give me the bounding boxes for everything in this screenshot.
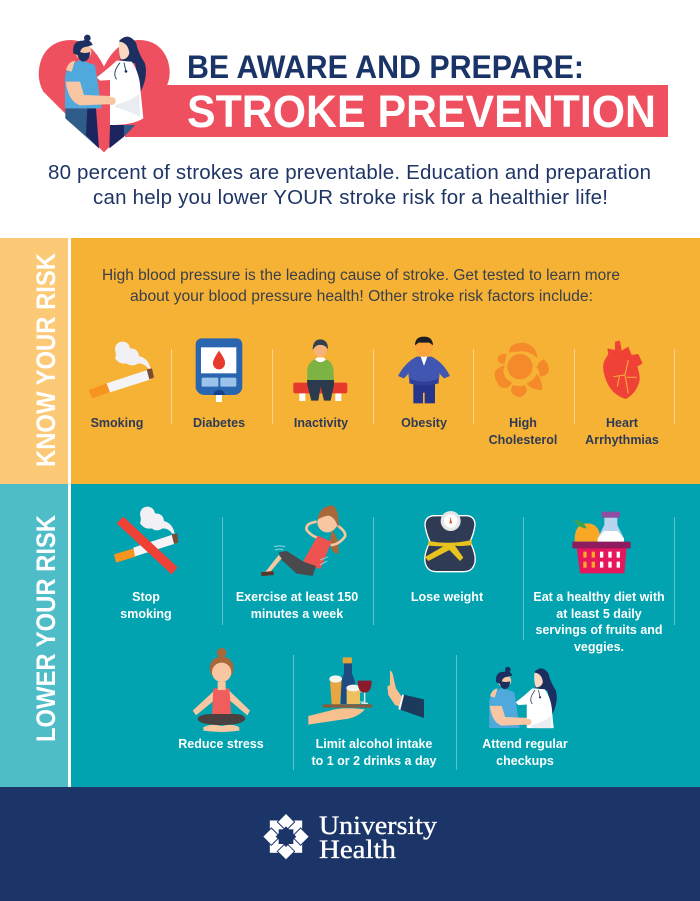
- label: diabetes: Diabetes: [193, 416, 245, 430]
- panel: lower your risk: [0, 484, 700, 787]
- label: limit alcohol: [311, 737, 437, 768]
- label: regular checkups: Attend regular: [482, 737, 568, 751]
- logo mark: [263, 813, 309, 860]
- label: high cholesterol: High: [509, 416, 537, 430]
- title line 2: STROKE PREVENTION: [187, 86, 656, 137]
- icon: scale with measuring tape: [425, 511, 475, 572]
- label: exercise: [236, 590, 358, 621]
- label: high cholesterol: Cholesterol: [489, 433, 557, 447]
- label: smoking: Smoking: [91, 416, 143, 430]
- icon: meditating woman: [193, 648, 250, 732]
- label: exercise: minutes a week: [251, 607, 343, 621]
- risk intro text: [102, 267, 620, 305]
- logo wordmark: [319, 811, 437, 864]
- label: exercise: Exercise at least 150: [236, 590, 358, 604]
- label: heart arrhythmias: [585, 416, 659, 447]
- label: inactivity: Inactivity: [294, 416, 348, 430]
- label: stop smoking: [120, 590, 172, 621]
- label: heart arrhythmias: Arrhythmias: [585, 433, 659, 447]
- label: lose weight: Lose weight: [411, 590, 484, 604]
- label: regular checkups: checkups: [496, 754, 554, 768]
- label: obesity: Obesity: [401, 416, 447, 430]
- logo wordmark: Health: [319, 835, 396, 864]
- label: healthy diet: [533, 590, 665, 654]
- label: healthy diet: veggies.: [574, 640, 624, 654]
- icon: person sitting: [293, 339, 347, 401]
- label: high cholesterol: [489, 416, 557, 447]
- icon: anatomical heart: [603, 341, 643, 399]
- intro text: can help you lower YOUR stroke risk for a healthier life!: [93, 186, 608, 209]
- risk intro text: High blood pressure is the leading cause of stroke. Get tested to learn more: [102, 267, 620, 284]
- icon: no smoking: [114, 507, 178, 574]
- logo wordmark: University: [319, 811, 437, 840]
- label: healthy diet: servings of fruits and: [535, 623, 663, 637]
- icon: glucose meter: [196, 338, 242, 402]
- heading: know your risk: KNOW YOUR RISK: [31, 253, 61, 467]
- label: healthy diet: at least 5 daily: [556, 607, 642, 621]
- label: heart arrhythmias: Heart: [606, 416, 639, 430]
- icon: basket of healthy food: [572, 512, 631, 573]
- label: limit alcohol: Limit alcohol intake: [316, 737, 432, 751]
- icon: person with obesity: [398, 337, 450, 403]
- label: stop smoking: Stop: [132, 590, 160, 604]
- header band: [125, 85, 668, 137]
- label: limit alcohol: to 1 or 2 drinks a day: [311, 754, 437, 768]
- icon: alcohol tray and stop hand: [308, 657, 424, 725]
- title line 1: BE AWARE AND PREPARE:: [187, 49, 584, 85]
- label: healthy diet: Eat a healthy diet with: [533, 590, 665, 604]
- icon: heart with patient and doctor: [39, 35, 170, 152]
- intro text: 80 percent of strokes are preventable. Education and preparation: [48, 161, 651, 184]
- label: reduce stress: Reduce stress: [178, 737, 264, 751]
- panel: know your risk: [0, 238, 700, 484]
- label: regular checkups: [482, 737, 568, 768]
- heading: lower your risk: LOWER YOUR RISK: [31, 515, 61, 742]
- icon: doctor and patient: [489, 666, 557, 728]
- icon: cigarette: [89, 342, 154, 398]
- footer: [0, 787, 700, 901]
- risk intro text: about your blood pressure health! Other stroke risk factors include:: [130, 288, 593, 305]
- label: stop smoking: smoking: [120, 607, 172, 621]
- intro text: [48, 161, 651, 209]
- icon: cholesterol: [495, 343, 549, 397]
- icon: woman exercising: [261, 506, 345, 576]
